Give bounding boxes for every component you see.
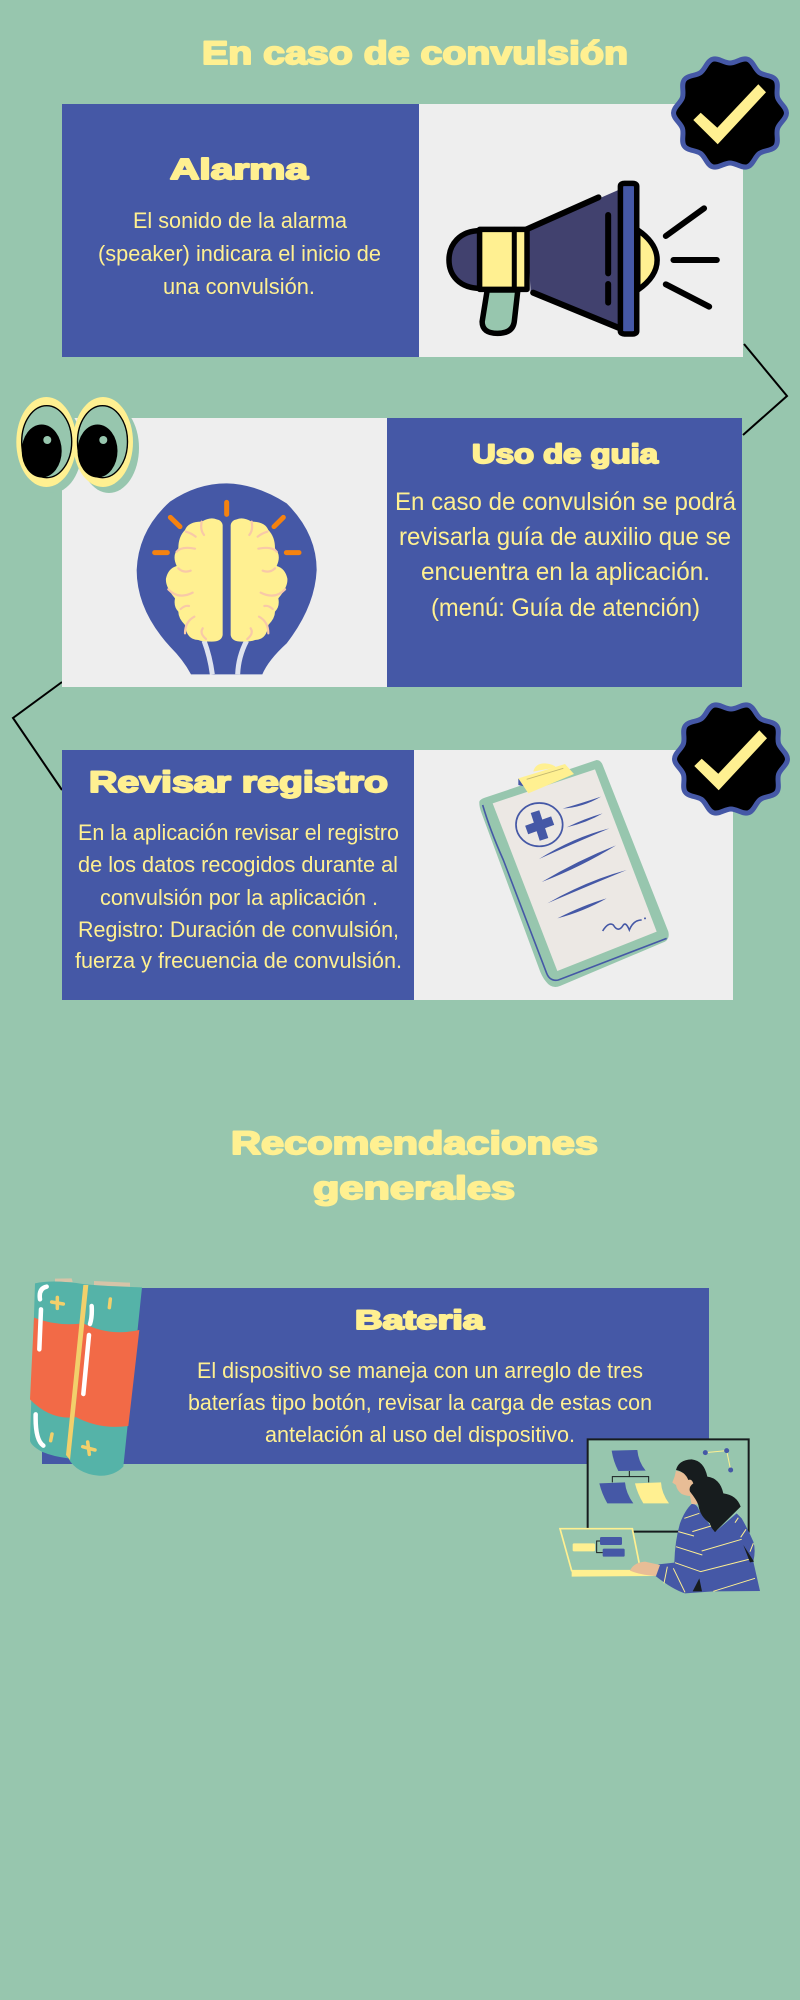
icon: brain in light bulb (137, 483, 317, 674)
text block: bateria description: baterías tipo botón, revisar la carga de estas con (188, 1390, 652, 1415)
text block: registro description: convulsión por la aplicación . (100, 885, 378, 910)
heading: Recomendaciones generales (231, 1125, 598, 1206)
arrow: connector from panel 2 to panel 3 (13, 682, 62, 790)
arrow: connector from panel 1 to panel 2 (743, 344, 787, 435)
panel background: gray (419, 104, 743, 357)
text block: alarma description: una convulsión. (163, 274, 315, 299)
panel: Revisar registro (62, 750, 733, 1000)
icon: check badge 2 (674, 705, 788, 813)
text block: bateria description: El dispositivo se maneja con un arreglo de tres (197, 1358, 643, 1383)
icon: woman at laptop with flowchart board (560, 1439, 760, 1593)
heading: Recomendaciones generales: generales (313, 1170, 515, 1206)
panel background: blue (62, 750, 414, 1000)
text block: bateria description: antelación al uso del dispositivo. (265, 1422, 575, 1447)
icon: clipboard (479, 760, 669, 987)
heading: Bateria: Bateria (355, 1305, 485, 1335)
panel background: blue (387, 418, 742, 687)
panel background: blue (62, 104, 419, 357)
panel: Uso de guia (62, 418, 742, 687)
text block: guia description: revisarla guía de auxilio que se (399, 523, 731, 551)
text block: registro description (75, 820, 402, 973)
panel background: blue (42, 1288, 709, 1464)
text block: alarma description (98, 208, 381, 299)
panel: Bateria (42, 1288, 709, 1464)
icon: cartoon eyes (16, 397, 139, 493)
text block: registro description: En la aplicación revisar el registro (78, 820, 399, 845)
text block: registro description: fuerza y frecuencia de convulsión. (75, 948, 402, 973)
text block: guia description: (menú: Guía de atención) (431, 594, 700, 622)
icon: megaphone (449, 183, 717, 334)
heading: Revisar registro: Revisar registro (89, 766, 388, 799)
icon: batteries (30, 1278, 142, 1476)
text block: guia description (395, 488, 736, 622)
text block: registro description: de los datos recogidos durante al (78, 852, 398, 877)
heading: Recomendaciones generales: Recomendaciones (231, 1125, 598, 1161)
text block: bateria description (188, 1358, 652, 1447)
text block: guia description: En caso de convulsión se podrá (395, 488, 736, 516)
text block: registro description: Registro: Duración de convulsión, (78, 917, 399, 942)
panel background: gray (62, 418, 387, 687)
heading: Alarma: Alarma (170, 154, 309, 186)
text block: alarma description: (speaker) indicara el inicio de (98, 241, 381, 266)
heading: Uso de guia: Uso de guia (472, 439, 659, 469)
text block: alarma description: El sonido de la alarma (133, 208, 348, 233)
title: En caso de convulsión: En caso de convulsión (202, 35, 628, 71)
panel background: gray (414, 750, 733, 1000)
text block: guia description: encuentra en la aplicación. (421, 558, 710, 586)
panel: Alarma (62, 104, 743, 357)
icon: check badge 1 (674, 59, 786, 167)
